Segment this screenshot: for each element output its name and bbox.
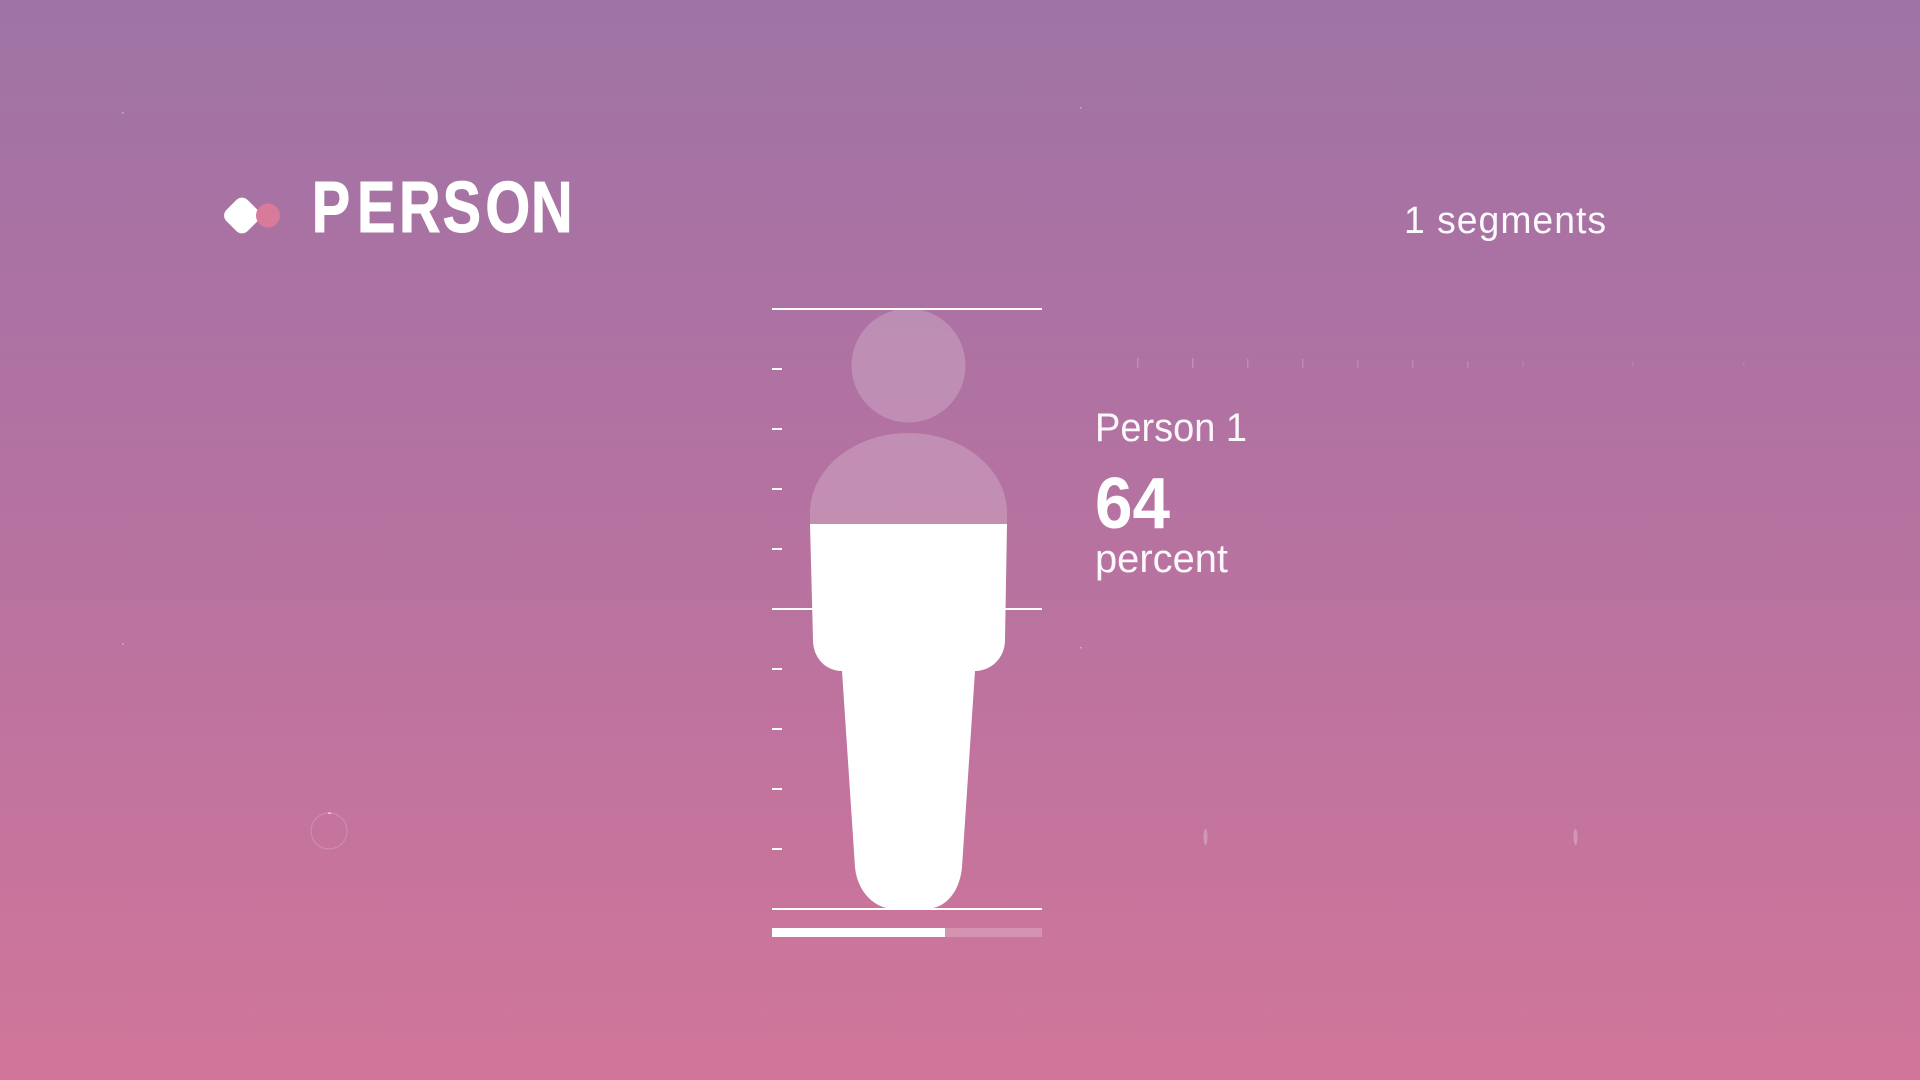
- segment count: 1 segments: [1404, 200, 1607, 242]
- person label: Person 1: [1095, 406, 1247, 450]
- figure body (unfilled part): [810, 433, 1007, 530]
- logo icon: [221, 194, 280, 237]
- value: 64: [1095, 464, 1170, 544]
- height scale: [772, 308, 1042, 910]
- decorative ring: [311, 812, 347, 849]
- decorative particles: [122, 107, 1744, 845]
- figure body (filled part): [810, 513, 1007, 909]
- figure head (unfilled): [852, 308, 966, 422]
- unit: percent: [1095, 537, 1228, 581]
- title: PERSON: [312, 167, 573, 247]
- person figure: [810, 308, 1007, 909]
- progress bar: [772, 928, 1042, 937]
